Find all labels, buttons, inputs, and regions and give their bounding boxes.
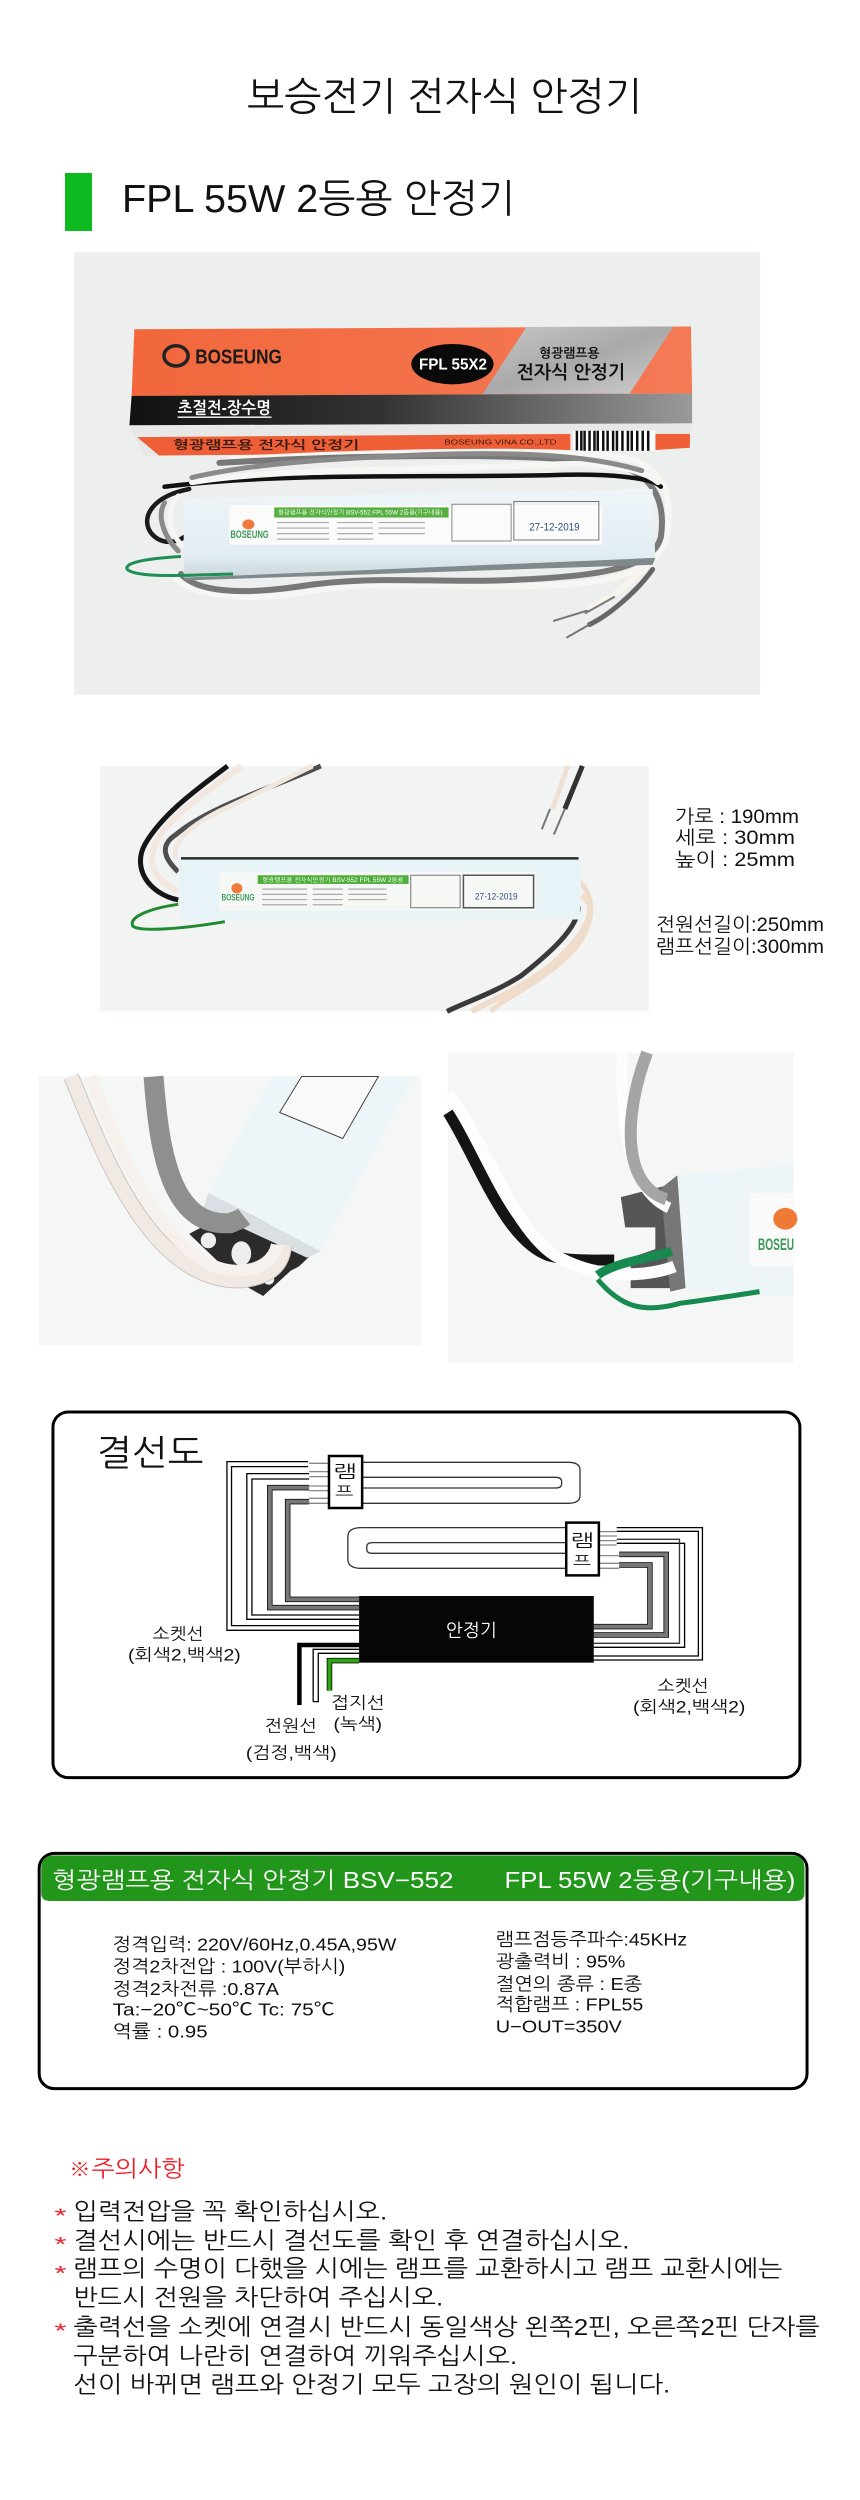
spec column left: 역률 : 0.95 — [113, 2021, 208, 2042]
product box: 형광램프용 전자식 안정기 — [173, 438, 359, 452]
section heading: FPL 55W 2등용 안정기 — [122, 178, 515, 221]
red bullets — [54, 2206, 66, 2342]
lamp socket left: 프 — [335, 1484, 354, 1501]
label: left socket wires: 소켓선 — [152, 1625, 203, 1643]
label: ground wire — [331, 1694, 385, 1733]
cautions heading: ※주의사항 — [68, 2157, 185, 2182]
ballast block: 안정기 — [446, 1620, 497, 1641]
lamp socket left — [329, 1456, 362, 1508]
product box: 형광램프용 — [539, 345, 600, 361]
lamp socket right — [566, 1523, 599, 1575]
dimensions text: 세로 : 30mm — [675, 828, 795, 849]
label: right socket wires: 소켓선 — [658, 1677, 709, 1696]
photo: wire entry close-up right — [448, 1053, 797, 1363]
spec header bar: 형광램프용 전자식 안정기 BSV−552 — [52, 1868, 453, 1893]
product box: BOSEUNG — [195, 346, 282, 368]
title: 보승전기 전자식 안정기 — [247, 76, 642, 119]
spec column left: 정격2차전류 :0.87A — [113, 1979, 279, 1999]
panel: specifications — [39, 1853, 807, 2089]
ballast body: 27-12-2019 — [529, 520, 580, 533]
label: left socket wires: (회색2,백색2) — [128, 1646, 241, 1665]
lamps — [348, 1462, 580, 1568]
dimensions text — [656, 807, 824, 958]
caution list: 구분하여 나란히 연결하여 끼워주십시오. — [73, 2344, 517, 2369]
spec column left: Ta:−20℃~50℃ Tc: 75℃ — [113, 1999, 335, 2020]
lamp socket right: 램 — [571, 1531, 594, 1551]
spec column left: 정격입력: 220V/60Hz,0.45A,95W — [113, 1934, 396, 1955]
red bullets: * — [54, 2321, 66, 2342]
caution list — [73, 2199, 820, 2398]
photo: wire entry close-up right: BOSEU — [758, 1235, 794, 1253]
label: ground wire: 접지선 — [331, 1694, 385, 1712]
photo: wire entry close-up left — [39, 1077, 421, 1345]
label: power wire: 전원선 — [265, 1717, 317, 1736]
ballast body: BOSEUNG — [222, 893, 254, 903]
right wires — [594, 1528, 702, 1660]
spec column left — [113, 1934, 396, 2042]
spec column right: U−OUT=350V — [496, 2016, 622, 2037]
label: power wire — [246, 1717, 337, 1762]
ballast body — [178, 857, 581, 920]
ballast body — [184, 489, 655, 580]
photo: ballast top view — [100, 766, 649, 1011]
red bullets: * — [54, 2263, 66, 2285]
spec column right: 절연의 종류 : E종 — [496, 1974, 642, 1994]
red bullets: * — [54, 2206, 66, 2227]
ballast body: 형광램프용 전자식안정기 BSV-552 FPL 55W 2등용 — [262, 877, 404, 884]
label: left socket wires — [128, 1625, 241, 1665]
label: ground wire: (녹색) — [334, 1715, 382, 1733]
product box — [129, 326, 692, 456]
section marker: green bar — [65, 173, 92, 231]
ballast body: 형광램프용 전자식안정기 BSV-552 FPL 55W 2등용(기구내용) — [278, 509, 443, 517]
caution list: 입력전압을 꼭 확인하십시오. — [73, 2199, 387, 2225]
spec column right: 램프점등주파수:45KHz — [496, 1929, 687, 1950]
ballast body: BOSEUNG — [230, 528, 269, 541]
label: right socket wires — [633, 1677, 745, 1717]
lamp socket left: 램 — [334, 1462, 357, 1481]
green ground wire — [127, 557, 233, 576]
label: power wire: (검정,백색) — [246, 1744, 337, 1762]
wiring diagram heading: 결선도 — [96, 1433, 203, 1473]
panel: wiring diagram — [53, 1412, 800, 1778]
product box: 초절전-장수명 — [178, 399, 271, 417]
power and ground wires — [299, 1645, 364, 1705]
caution list: 결선시에는 반드시 결선도를 확인 후 연결하십시오. — [73, 2228, 629, 2254]
wires — [147, 452, 669, 637]
product box: 전자식 안정기 — [517, 362, 625, 383]
spec column left: 정격2차전압 : 100V(부하시) — [113, 1956, 345, 1977]
lamp socket right: 프 — [573, 1554, 591, 1570]
spec header bar — [41, 1855, 804, 1901]
cautions — [54, 2157, 820, 2398]
dimensions text: 전원선길이:250mm — [656, 915, 824, 936]
red bullets: * — [54, 2234, 66, 2256]
spec column right — [496, 1929, 687, 2037]
dimensions text: 가로 : 190mm — [675, 807, 799, 828]
ballast body: 27-12-2019 — [475, 892, 518, 902]
product box: BOSEUNG VINA CO.,LTD — [444, 438, 557, 446]
caution list: 반드시 전원을 차단하여 주십시오. — [73, 2286, 443, 2311]
dimensions text: 램프선길이:300mm — [656, 937, 824, 958]
spec column right: 광출력비 : 95% — [496, 1951, 625, 1972]
ballast block — [359, 1596, 594, 1663]
dimensions text: 높이 : 25mm — [675, 850, 795, 871]
label: right socket wires: (회색2,백색2) — [633, 1698, 745, 1717]
spec column right: 적합램프 : FPL55 — [496, 1994, 643, 2015]
green ground wire — [132, 904, 225, 929]
product box: FPL 55X2 — [419, 355, 487, 373]
left wires — [227, 1462, 359, 1630]
photo: boxed ballast with wires — [74, 252, 760, 695]
